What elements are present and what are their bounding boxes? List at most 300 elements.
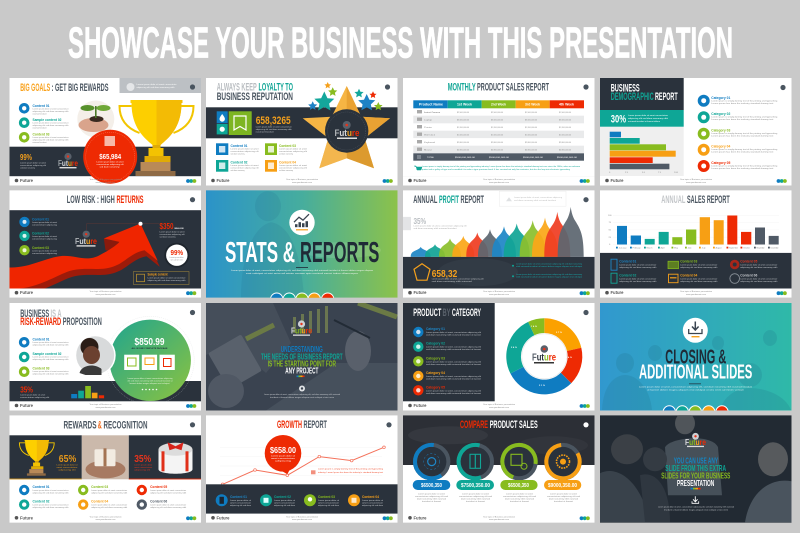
35 percent stat: 35% — [414, 217, 426, 226]
green price circle — [106, 316, 194, 404]
logo: Future — [75, 236, 97, 246]
horizontal bar chart — [609, 132, 679, 174]
corner badge — [780, 85, 786, 90]
stat 658,3265: euismod tincidunt — [256, 130, 274, 134]
bar chart: 0 — [609, 244, 611, 246]
content 01: Content 01 — [32, 104, 50, 108]
teal 30 percent band: euismod tincidunt ut laoreet dolore — [628, 120, 661, 123]
content 04: adipiscing elit sed diam nonummy nibh — [91, 506, 128, 509]
red stat circle: sed diam nonummy — [100, 166, 120, 168]
footer: www.yourdomain.com — [292, 518, 312, 521]
dark title panel: REPORT — [655, 91, 678, 103]
table rows: $1,200,000.00 — [491, 127, 504, 129]
footer: Your topic of Business presentation — [90, 515, 122, 518]
content 04: adipiscing elit sed diam — [362, 504, 383, 507]
content 04 — [668, 274, 718, 283]
category 05 — [698, 160, 778, 172]
slide: annual sales report: SALES REPORT — [687, 194, 730, 206]
footer — [211, 178, 393, 184]
logo — [291, 320, 312, 336]
category 04: Category 04 — [711, 144, 731, 148]
content 03: Content 03 — [32, 366, 50, 370]
99 percent circle: Lorem ipsum dolor — [170, 256, 184, 259]
green price circle: laoreet dolore magna aliquam erat volutpat — [130, 382, 170, 385]
category 03: Category 03 — [426, 356, 445, 360]
grey chart area — [600, 127, 684, 176]
column descriptions: diam nonummy nibh euismod — [549, 498, 579, 500]
sample content box — [134, 272, 189, 284]
ring green — [498, 440, 540, 483]
slide: compare product sales — [403, 415, 594, 523]
content 02: adipiscing elit sed diam nonummy nibh — [32, 506, 69, 509]
table rows: $4,900,000.00 — [559, 150, 572, 152]
table rows: $1,200,000.00 — [559, 127, 572, 129]
content 02: Lorem ipsum dolor sit amet — [230, 164, 259, 167]
red price bubble — [265, 435, 301, 474]
chart legend: July — [702, 247, 706, 249]
teal 30 percent band: 30% — [611, 114, 626, 126]
title: ANNUAL — [413, 194, 437, 206]
title: BIG GOALS — [20, 82, 50, 94]
subtitle: Lorem ipsum dolor sit amet, consectetuer adipiscing elit, sed diam nonummy nibh euismod tincidunt ut laoreet dolore magna aliquam — [231, 269, 373, 272]
horizontal bar chart: 25 — [625, 172, 629, 174]
title: CLOSING & — [665, 346, 726, 369]
content 01: amet consectetuer — [230, 501, 251, 504]
desk photo shapes — [206, 303, 398, 410]
content 01: Content 01 — [230, 144, 248, 148]
footer: www.yourdomain.com — [292, 181, 312, 184]
stat 350 million: consectetuer adipiscing elit — [160, 233, 185, 236]
table rows: $2,500,000.00 — [457, 112, 470, 114]
sample content box: Sample content — [148, 273, 168, 277]
content 02: adipiscing elit sed diam — [274, 504, 295, 507]
content 03: consectetuer adipiscing — [32, 252, 58, 255]
content 01: Content 01 — [32, 485, 50, 489]
title — [64, 420, 148, 432]
small bar chart — [71, 386, 104, 398]
table rows: Wall Clock — [424, 134, 436, 136]
corner badge — [190, 422, 195, 427]
corner badge — [385, 84, 390, 90]
content 01 — [19, 337, 69, 348]
value pill blue — [413, 480, 450, 490]
column descriptions: consectetuer adipiscing elit sed — [503, 495, 537, 498]
dark band — [403, 257, 594, 288]
title: REPORT — [460, 194, 484, 206]
dark band — [10, 381, 201, 401]
content 01: sed diam nonummy — [230, 154, 245, 156]
arrow tip dot — [138, 222, 142, 226]
corner badge — [583, 422, 589, 427]
footer: www.yourdomain.com — [96, 518, 116, 521]
note with cart icon: printer took a galley of type and scrambled it to make a type specimen book. It has survived not only five centuries, but also the leap into electronic typesetting — [422, 168, 571, 171]
green price circle: Lorem ipsum dolor sit amet consectetuer adipiscing — [128, 377, 173, 380]
table rows: $2,500,000.00 — [491, 112, 504, 114]
title: LOW RISK : HIGH — [67, 194, 115, 206]
small trophy — [19, 440, 54, 476]
callout box: sed diam nonummy nibh euismod tincidunt — [514, 199, 556, 202]
callout box — [499, 191, 566, 206]
chart legend: August — [716, 246, 722, 249]
category 05: sed diam nonummy nibh euismod tincidunt ut laoreet — [426, 392, 481, 395]
footer: www.yourdomain.com — [96, 406, 116, 409]
dark side panel — [403, 303, 495, 401]
content 01: Lorem ipsum dolor sit amet consectetuer — [32, 489, 69, 492]
green price circle: ALL IN ONE COMPLETE PACKAGE — [132, 347, 168, 350]
footer: Your topic of Business presentation — [286, 515, 319, 518]
donut chart: 14% — [566, 356, 572, 359]
title — [661, 194, 730, 206]
content 01: Content 01 — [230, 495, 247, 499]
bar chart: 75 — [608, 222, 612, 224]
35 percent stat: adipiscing elit — [134, 468, 151, 471]
headline — [661, 455, 730, 488]
35 percent stat: consectetuer adipiscing elit — [20, 396, 50, 399]
logo — [685, 433, 706, 447]
content 01: adipiscing elit sed diam nonummy nibh — [32, 491, 69, 494]
category 03: Lorem ipsum dolor sit amet, consectetuer adipiscing elit — [426, 360, 481, 363]
red stat circle: consectetuer adipiscing elit — [96, 163, 124, 166]
content 03: Content 03 — [32, 132, 50, 136]
category 01: Lorem ipsum has been the industry standard dummy text — [711, 102, 774, 105]
teal 30 percent band — [600, 110, 684, 127]
title: MONTHLY — [448, 82, 476, 94]
audience silhouettes — [602, 330, 791, 410]
column descriptions: diam nonummy nibh euismod — [461, 498, 491, 500]
column descriptions: diam nonummy nibh euismod — [417, 498, 447, 500]
99 percent stat: Lorem ipsum dolor sit amet — [20, 162, 46, 164]
table rows: $1,500,000.00 — [559, 112, 572, 114]
chart legend: April — [660, 246, 665, 249]
category 04: Lorem ipsum is simply dummy text of the printing and typesetting — [711, 148, 778, 151]
content 03: adipiscing elit sed diam nonummy nibh — [680, 266, 718, 269]
right notes — [512, 263, 583, 279]
corner badge — [583, 84, 589, 90]
content 03: adipiscing elit sed diam nonummy nibh — [91, 491, 128, 494]
color bar — [296, 376, 304, 377]
stat 658,32: Lorem ipsum dolor sit amet, consectetuer adipiscing elit — [432, 278, 484, 281]
logo: Future — [685, 438, 706, 447]
red price bubble: amet consectetuer — [271, 457, 295, 460]
table rows: $3,500,000.00 — [525, 120, 538, 122]
column descriptions: consectetuer adipiscing elit sed — [415, 495, 449, 498]
content 01 — [19, 485, 69, 495]
value pill teal — [456, 480, 494, 490]
body text — [639, 386, 752, 392]
category 05: Lorem ipsum dolor sit amet, consectetuer adipiscing elit — [426, 389, 481, 392]
title — [639, 346, 752, 384]
content 05: Content 05 — [150, 485, 167, 489]
content 03: adipiscing elit sed diam nonummy nibh — [32, 372, 69, 376]
sample content box: Lorem ipsum dolor sit amet consectetuer — [148, 277, 186, 280]
dark title panel — [600, 78, 684, 110]
footer: Future — [216, 515, 230, 520]
spike area chart — [411, 207, 584, 257]
column descriptions — [415, 492, 581, 503]
content 02: Lorem ipsum dolor sit amet consectetuer — [619, 278, 657, 281]
content 04: adipiscing elit sed diam nonummy nibh — [680, 280, 718, 283]
slide: understanding the needs — [206, 303, 398, 410]
body text — [264, 393, 341, 399]
stat 658,3265: 658,3265 — [256, 115, 291, 127]
green price circle: elit sed diam nonummy nibh euismod tincidunt ut — [128, 380, 173, 382]
content 01: Lorem ipsum dolor sit amet consectetuer — [32, 108, 69, 110]
table rows: $4,900,000.00 — [457, 150, 470, 152]
logo on star — [334, 121, 360, 139]
content 01 — [19, 103, 69, 116]
download icon — [692, 496, 699, 503]
content 01: Lorem ipsum dolor sit — [230, 499, 251, 502]
headline: UNDERSTANDING — [281, 344, 323, 354]
category 05: Lorem ipsum is simply dummy text of the printing and typesetting — [711, 165, 778, 168]
column descriptions: tincidunt ut laoreet — [510, 500, 529, 503]
table header: 3rd Week — [525, 102, 540, 106]
chart legend: June — [688, 247, 692, 249]
content 06: Content 06 — [740, 274, 758, 278]
category 01: Category 01 — [711, 96, 731, 100]
footer — [403, 176, 594, 184]
stat 658,3265 — [256, 116, 292, 132]
slide: big goals — [10, 78, 201, 186]
dark panel — [10, 210, 201, 288]
content 04 — [348, 494, 383, 507]
note with cart icon: Lorem ipsum is simply dummy text of the printing and typesetting industry. Lorem Ipsum has been the industry's standard dummy text ever since the 1500s, when an unknown — [422, 165, 581, 168]
photo silhouette — [241, 191, 381, 297]
99 percent stat: sed diam nonummy — [20, 168, 36, 170]
title: REWARDS — [64, 420, 97, 432]
body text: tincidunt ut laoreet dolore magna aliquam erat volutpat ut wisi enim — [270, 396, 334, 399]
footer: www.yourdomain.com — [489, 518, 509, 521]
chart note: industry. Lorem Ipsum has been the industry's standard dummy text — [318, 471, 383, 474]
body text: ut laoreet dolore magna aliquam erat volutpat ut wisi enim ad minim veniam — [647, 388, 744, 392]
category 04 — [413, 371, 481, 381]
slide: stats and reports — [206, 190, 398, 305]
table — [413, 100, 584, 161]
slide: extra slides — [600, 412, 792, 523]
content 03 — [304, 494, 339, 507]
content 01 — [216, 143, 259, 156]
slide: risk-reward proposition — [10, 303, 201, 410]
right dark panel — [129, 435, 201, 479]
content 03: Content 03 — [279, 144, 296, 148]
35 percent stat: 35% — [20, 386, 33, 394]
65 percent stat: 65% — [59, 454, 76, 465]
value pill blue: $6500,350 — [421, 483, 442, 489]
content 02 — [260, 494, 295, 507]
footer: Future — [414, 403, 427, 408]
content 04 — [78, 499, 128, 510]
donut logo — [532, 345, 556, 364]
content 02: consectetuer adipiscing — [32, 238, 58, 241]
content 04: Lorem ipsum dolor sit amet consectetuer — [680, 278, 718, 281]
gold star — [303, 86, 390, 168]
dark textured header — [403, 415, 594, 465]
donut chart: 14% — [531, 325, 537, 328]
bar chart — [608, 215, 779, 249]
chart legend: March — [646, 246, 653, 249]
table rows: $2,800,000.00 — [491, 142, 504, 144]
content 02 — [19, 499, 69, 510]
portrait circle — [75, 335, 116, 376]
ring orange — [540, 439, 586, 484]
footer: Future — [414, 290, 427, 295]
slide: annual profit report — [403, 190, 594, 298]
column descriptions: tincidunt ut laoreet — [466, 500, 485, 503]
teal 30 percent band: Lorem ipsum dolor sit amet consectetuer — [628, 114, 668, 117]
footer: Your topic of Business presentation — [286, 178, 319, 181]
chart note: Lorem ipsum is simply dummy text of the printing and typesetting — [318, 467, 384, 470]
grey callout top right — [120, 78, 201, 93]
bar chart: 25 — [608, 237, 612, 239]
red stat circle: Lorem ipsum dolor sit amet — [96, 160, 124, 164]
content 04: consectetuer adipiscing elit — [279, 166, 307, 170]
footer: www.yourdomain.com — [489, 406, 509, 409]
content 05: Content 05 — [740, 260, 758, 264]
category 05: Category 05 — [711, 161, 731, 165]
headline — [261, 344, 343, 376]
chart legend: November — [756, 246, 765, 249]
footer: Future — [610, 178, 624, 183]
content 02: adipiscing elit sed diam nonummy nibh — [32, 358, 69, 361]
footer — [408, 403, 590, 409]
table rows — [413, 110, 584, 153]
content 04: Lorem ipsum dolor sit — [362, 499, 383, 502]
content 06 — [137, 499, 187, 510]
title: COMPARE — [460, 419, 488, 431]
table total row: $500,000,000.00 — [455, 157, 476, 159]
content 06: Content 06 — [150, 500, 167, 504]
footer — [15, 515, 196, 521]
corner badge — [583, 197, 589, 202]
slide: monthly product sales report — [403, 78, 594, 186]
category 05 — [413, 385, 481, 396]
content 02: Sample content 02 — [32, 352, 62, 356]
table total row: $500,000,000.00 — [489, 157, 510, 159]
99 percent stat — [20, 154, 46, 169]
chart legend: January — [618, 246, 627, 249]
right notes: nibh euismod tincidunt ut laoreet dolore magna aliquam erat volutpat — [516, 265, 582, 268]
content 02 — [19, 117, 69, 130]
title: STATS & — [225, 237, 295, 269]
content 05: adipiscing elit sed diam nonummy nibh — [150, 491, 187, 494]
connector to callout — [86, 224, 160, 230]
title: GROWTH — [277, 419, 302, 431]
content 03 — [19, 366, 69, 377]
table rows: Printer — [424, 126, 432, 129]
99 percent stat: 99% — [20, 153, 32, 162]
title — [20, 308, 102, 328]
grey callout top right: adipiscing elit sed diam nonummy nibh — [136, 86, 175, 89]
content 04: amet consectetuer — [362, 501, 383, 504]
content 01: euismod tincidunt — [32, 112, 47, 116]
content 03: Content 03 — [680, 260, 698, 264]
category 01: Lorem ipsum is simply dummy text of the printing and typesetting — [711, 100, 778, 103]
content 01 — [611, 259, 657, 270]
download badge — [683, 318, 708, 343]
content 02: Lorem ipsum dolor sit amet consectetuer — [32, 122, 69, 124]
table rows: $1,200,000.00 — [525, 127, 538, 129]
table total row — [413, 153, 584, 161]
content 03: Lorem ipsum dolor sit amet — [279, 148, 307, 150]
content 04 — [265, 160, 307, 172]
content 06: adipiscing elit sed diam nonummy nibh — [740, 280, 778, 283]
footer — [211, 515, 393, 521]
content 02: Lorem ipsum dolor sit — [274, 499, 295, 502]
chart legend: October — [743, 246, 750, 249]
horizontal bar chart: 75 — [658, 172, 662, 174]
donut chart: 27% — [556, 332, 562, 334]
bar chart: 50 — [608, 230, 612, 232]
value pill green: $6500,350 — [508, 483, 529, 489]
category 01: sed diam nonummy nibh euismod tincidunt ut laoreet — [426, 334, 481, 336]
slide: loyalty to business reputation: LOYALTY TO — [258, 82, 293, 94]
table rows: $2,800,000.00 — [457, 142, 470, 144]
slide: product by category: CATEGORY — [452, 307, 481, 319]
content 01: Lorem ipsum dolor sit amet consectetuer — [32, 341, 69, 344]
content 03 — [19, 245, 58, 255]
stat 658,3265: adipiscing elit sed diam nonummy nibh — [256, 128, 292, 131]
logo — [75, 231, 97, 247]
small icon — [299, 386, 305, 392]
footer: www.yourdomain.com — [96, 181, 116, 184]
content 01: Content 01 — [32, 218, 49, 222]
category 02: Lorem ipsum dolor sit amet, consectetuer adipiscing elit — [426, 346, 481, 349]
headline: ANY PROJECT — [285, 366, 319, 376]
chart legend — [616, 246, 779, 249]
content 03: Lorem ipsum dolor sit amet consectetuer — [32, 136, 69, 139]
chart icon badge — [289, 210, 315, 235]
table rows: $4,900,000.00 — [525, 150, 538, 152]
content 01 — [216, 494, 251, 507]
footer: www.yourdomain.com — [686, 181, 706, 184]
right notes: nibh euismod tincidunt ut laoreet dolore magna aliquam erat volutpat — [516, 276, 582, 279]
65 percent stat — [56, 454, 78, 471]
table rows: $1,500,000.00 — [525, 134, 538, 136]
stat 658,32: 658,32 — [432, 269, 458, 280]
dark title panel: DEMOGRAPHIC — [611, 91, 654, 103]
headline: YOU CAN USE ANY — [674, 455, 718, 465]
content 04: Lorem ipsum dolor sit amet consectetuer — [91, 503, 127, 506]
content 05 — [137, 485, 187, 495]
chart legend: September — [729, 246, 738, 249]
35 percent stat: 35% — [134, 454, 151, 465]
red stat circle — [83, 130, 137, 184]
stat 350 million: $350 — [160, 222, 174, 231]
title: PRODUCT — [413, 307, 441, 319]
left dark panel — [10, 435, 82, 479]
content 01: Lorem ipsum dolor sit amet — [32, 221, 57, 224]
donut logo: Future — [532, 352, 556, 364]
note with cart icon — [414, 166, 580, 170]
content 03: euismod tincidunt — [32, 141, 47, 144]
content 02 — [19, 352, 69, 362]
category 03: Category 03 — [711, 128, 731, 132]
content 04: Content 04 — [680, 274, 698, 278]
footer — [605, 178, 787, 184]
title: IS A — [50, 308, 62, 320]
content 04: sed diam nonummy — [279, 170, 294, 172]
title: & — [98, 420, 102, 432]
content 03: Lorem ipsum dolor sit amet consectetuer — [680, 264, 718, 267]
color bar — [690, 488, 700, 489]
content 03: Lorem ipsum dolor sit amet consectetuer — [91, 489, 127, 492]
content 01: consectetuer adipiscing — [32, 224, 58, 227]
footer — [15, 403, 196, 409]
content 02: euismod tincidunt — [32, 126, 47, 130]
table rows: $4,900,000.00 — [491, 150, 504, 152]
headline: THE NEEDS OF BUSINESS REPORT — [261, 351, 343, 361]
column descriptions: tincidunt ut laoreet — [554, 500, 573, 503]
